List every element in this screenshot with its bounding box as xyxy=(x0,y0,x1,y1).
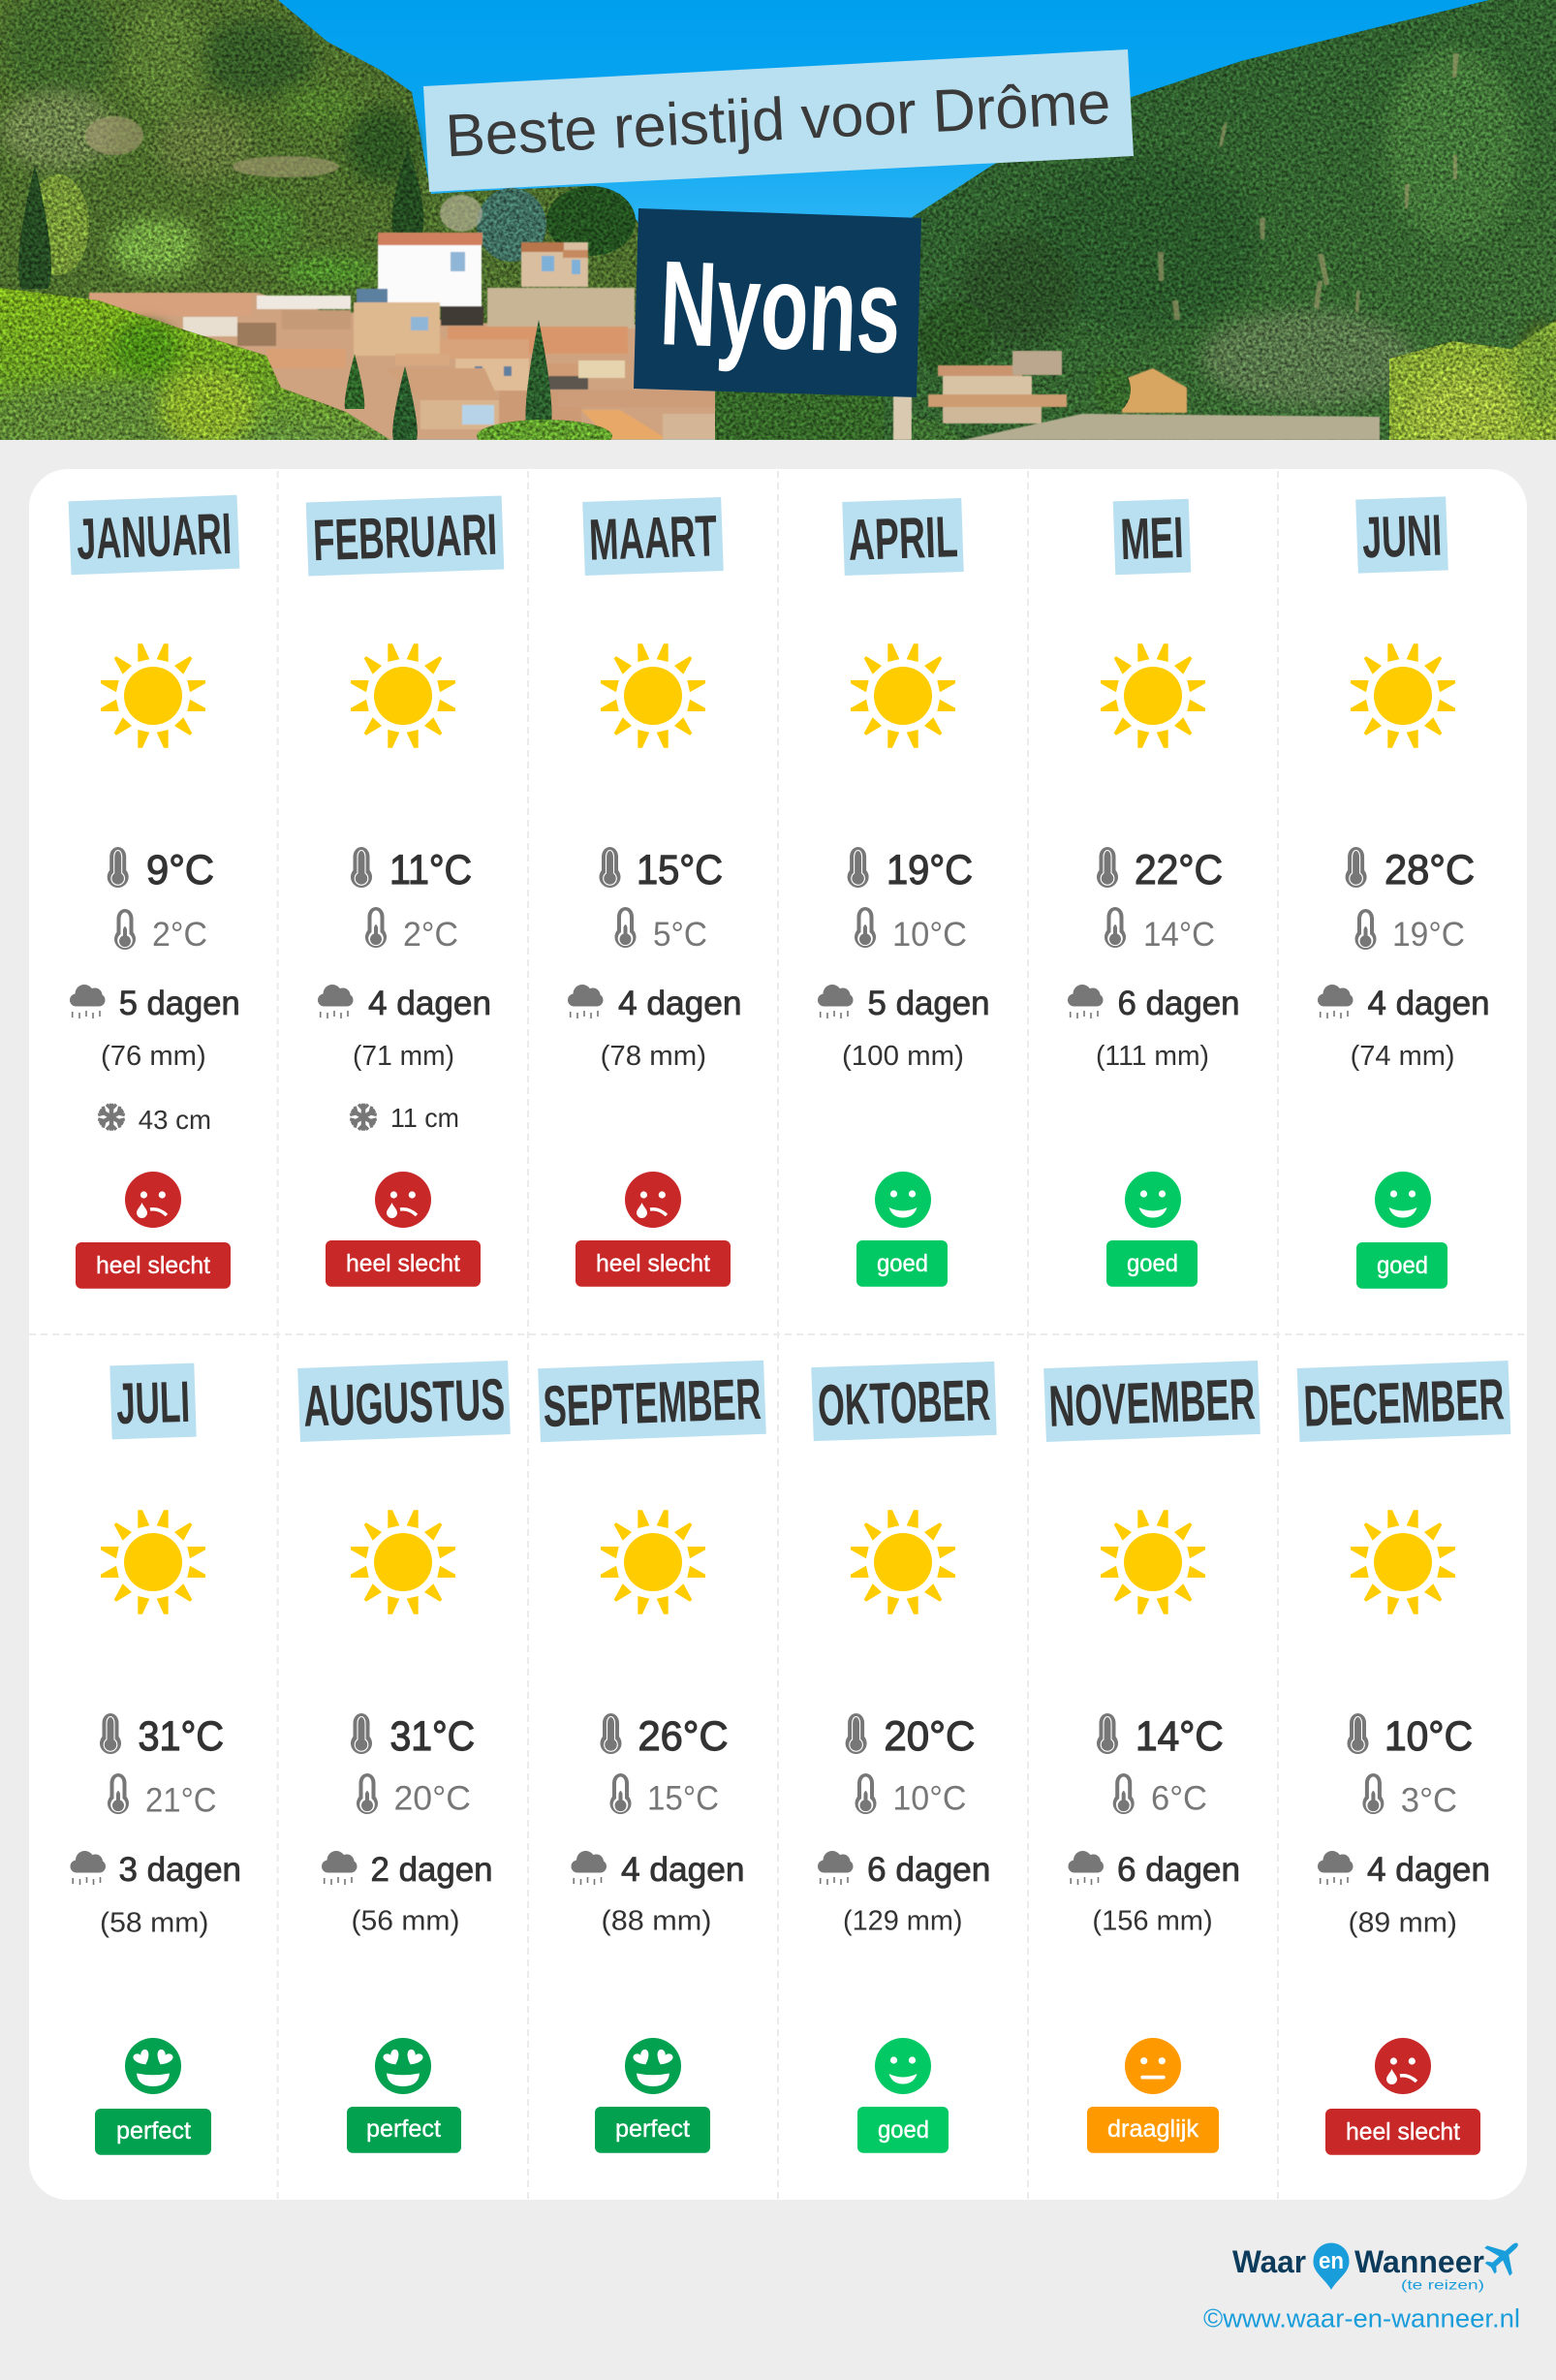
low temperature: 2°C xyxy=(403,916,458,954)
logo: Waar en Wanneer: Waar xyxy=(1232,2244,1306,2279)
rating badge: heel slecht xyxy=(1346,2118,1460,2145)
icon: sun xyxy=(351,643,455,748)
snowfall xyxy=(97,1104,211,1135)
logo: Waar en Wanneer: (te reizen) xyxy=(1401,2277,1484,2293)
rocks and mountain streaks xyxy=(85,53,1459,320)
heading: januari: JANUARI xyxy=(76,501,233,572)
rating badge xyxy=(95,2109,211,2155)
month: maart xyxy=(568,497,742,1287)
heading: maart xyxy=(582,497,724,576)
rainfall: (78 mm) xyxy=(601,1041,706,1072)
heading: november: NOVEMBER xyxy=(1047,1366,1257,1439)
icon: sun xyxy=(601,643,705,748)
place banner: Nyons xyxy=(634,208,921,397)
low temperature xyxy=(357,1773,471,1818)
heading: oktober xyxy=(811,1362,997,1441)
low temperature: 10°C xyxy=(892,1780,966,1818)
heading: februari: FEBRUARI xyxy=(312,502,498,573)
high temperature xyxy=(351,847,472,893)
high temperature: 22°C xyxy=(1135,847,1223,893)
rating badge: draaglijk xyxy=(1107,2115,1198,2143)
rain days: 6 dagen xyxy=(867,1851,990,1889)
low temperature: 14°C xyxy=(1143,916,1215,954)
icon: sun xyxy=(1351,1510,1455,1614)
rating badge xyxy=(347,2107,461,2153)
snowfall: 11 cm xyxy=(390,1103,459,1133)
place banner: Nyons: Nyons xyxy=(658,236,903,379)
logo: Waar en Wanneer xyxy=(1232,2230,1530,2293)
icon: rating face xyxy=(1375,2038,1431,2094)
low temperature: 6°C xyxy=(1151,1780,1207,1818)
rating badge: heel slecht xyxy=(596,1250,710,1277)
low temperature xyxy=(855,1773,966,1818)
rainfall: (156 mm) xyxy=(1092,1906,1213,1937)
heading: juli xyxy=(109,1363,197,1439)
heading: juli: JULI xyxy=(115,1369,191,1436)
rain days: 4 dagen xyxy=(1367,1851,1490,1889)
high temperature xyxy=(848,847,973,893)
snowfall: 43 cm xyxy=(139,1105,211,1135)
rain days: 4 dagen xyxy=(618,985,742,1022)
snowfall xyxy=(349,1103,459,1133)
high temperature xyxy=(1097,1713,1224,1760)
icon: rating face xyxy=(1375,1172,1431,1228)
icon: sun xyxy=(1101,1510,1205,1614)
logo: Waar en Wanneer: en xyxy=(1319,2248,1344,2274)
low temperature: 2°C xyxy=(152,916,207,954)
low temperature xyxy=(1105,907,1215,954)
high temperature: 11°C xyxy=(389,847,472,893)
rain days: 4 dagen xyxy=(621,1851,744,1889)
rating badge xyxy=(595,2107,710,2153)
high temperature xyxy=(599,847,723,893)
icon: sun xyxy=(351,1510,455,1614)
icon: rating face xyxy=(625,2038,681,2094)
high temperature xyxy=(100,1713,224,1760)
low temperature xyxy=(365,907,458,954)
rainfall: (88 mm) xyxy=(601,1906,711,1937)
icon: rating face xyxy=(875,2038,931,2094)
high temperature xyxy=(351,1713,475,1760)
heading: juni xyxy=(1355,496,1448,574)
rainfall: (74 mm) xyxy=(1351,1041,1455,1072)
title banner: Beste reistijd voor Drôme xyxy=(423,49,1134,192)
icon: sun xyxy=(851,1510,955,1614)
month: januari xyxy=(69,495,240,1289)
month: april xyxy=(818,498,990,1287)
rain days: 6 dagen xyxy=(1118,985,1240,1022)
rain days: 4 dagen xyxy=(368,985,491,1022)
icon: sun xyxy=(851,643,955,748)
header photo: Nyons village and mountains xyxy=(0,0,1556,453)
high temperature: 9°C xyxy=(146,847,214,893)
high temperature: 20°C xyxy=(884,1713,975,1760)
high temperature xyxy=(108,847,214,893)
rain days: 6 dagen xyxy=(1117,1851,1240,1889)
low temperature: 5°C xyxy=(653,916,707,954)
rainfall: (71 mm) xyxy=(353,1041,454,1072)
low temperature: 3°C xyxy=(1401,1782,1457,1820)
rainfall: (100 mm) xyxy=(842,1041,964,1072)
icon: rating face xyxy=(1125,2038,1181,2094)
icon: rating face xyxy=(1125,1172,1181,1228)
village buildings xyxy=(89,233,1380,440)
high temperature: 19°C xyxy=(887,847,973,893)
website credit: ©www.waar-en-wanneer.nl xyxy=(1203,2304,1520,2333)
heading: april xyxy=(842,498,964,576)
heading: oktober: OKTOBER xyxy=(817,1367,991,1438)
rainfall: (56 mm) xyxy=(351,1906,459,1937)
month: februari xyxy=(306,495,504,1287)
heading: juni: JUNI xyxy=(1361,503,1443,570)
rating badge: goed xyxy=(878,2116,929,2144)
rainfall: (58 mm) xyxy=(100,1908,209,1939)
panel: months card xyxy=(29,469,1527,2200)
month: mei xyxy=(1068,499,1240,1287)
month: november xyxy=(1043,1361,1260,2153)
rating badge xyxy=(576,1240,731,1287)
rating badge xyxy=(856,1240,948,1287)
icon: rating face xyxy=(625,1172,681,1228)
rating badge: perfect xyxy=(615,2115,690,2143)
rating badge xyxy=(1325,2109,1480,2155)
low temperature xyxy=(610,1773,719,1818)
rating badge: heel slecht xyxy=(346,1250,460,1277)
icon: rating face xyxy=(125,2038,181,2094)
month: juli xyxy=(70,1363,241,2155)
heading: augustus xyxy=(297,1361,511,1442)
title banner: Beste reistijd voor Drôme: Beste reistijd voor Drôme xyxy=(444,70,1112,170)
high temperature: 28°C xyxy=(1385,847,1475,893)
rating badge xyxy=(1106,1240,1198,1287)
icon: map pin xyxy=(1313,2242,1350,2290)
rating badge xyxy=(1087,2107,1219,2153)
rating badge: perfect xyxy=(116,2117,191,2145)
low temperature: 19°C xyxy=(1392,916,1465,954)
low temperature xyxy=(614,907,707,954)
icon: rating face xyxy=(875,1172,931,1228)
logo: Waar en Wanneer: Wanneer xyxy=(1354,2244,1484,2279)
low temperature xyxy=(1362,1773,1457,1820)
heading: september: SEPTEMBER xyxy=(542,1366,762,1439)
high temperature xyxy=(601,1713,729,1760)
icon: sun xyxy=(101,643,205,748)
rain days: 2 dagen xyxy=(370,1851,492,1889)
icon: rating face xyxy=(375,1172,431,1228)
rain days: 4 dagen xyxy=(1368,985,1490,1022)
low temperature: 21°C xyxy=(145,1782,217,1820)
low temperature: 20°C xyxy=(393,1780,471,1818)
low temperature xyxy=(114,909,207,954)
rainfall: (111 mm) xyxy=(1096,1041,1209,1072)
heading: augustus: AUGUSTUS xyxy=(302,1366,506,1439)
high temperature: 10°C xyxy=(1385,1713,1473,1760)
high temperature: 31°C xyxy=(389,1713,475,1760)
icon: airplane xyxy=(1478,2230,1530,2282)
high temperature xyxy=(1346,847,1475,893)
low temperature xyxy=(1113,1773,1207,1818)
rating badge: goed xyxy=(1377,1252,1428,1279)
icon: rating face xyxy=(125,1172,181,1228)
rain days: 5 dagen xyxy=(868,985,990,1022)
high temperature xyxy=(1097,847,1223,893)
heading: april: APRIL xyxy=(847,504,959,573)
rain days: 3 dagen xyxy=(118,1851,241,1889)
rating badge: goed xyxy=(1127,1250,1178,1277)
month: december xyxy=(1297,1361,1510,2155)
high temperature xyxy=(1347,1713,1473,1760)
rainfall: (129 mm) xyxy=(843,1906,963,1937)
rating badge xyxy=(326,1240,481,1287)
heading: februari xyxy=(306,495,504,577)
icon: sun xyxy=(1101,643,1205,748)
icon: rating face xyxy=(375,2038,431,2094)
rainfall: (76 mm) xyxy=(101,1041,206,1072)
heading: maart: MAART xyxy=(588,503,718,573)
low temperature xyxy=(855,907,967,954)
low temperature xyxy=(108,1773,217,1820)
month: augustus xyxy=(297,1361,511,2153)
rating badge: goed xyxy=(877,1250,928,1277)
rating badge: perfect xyxy=(366,2115,441,2143)
rating badge xyxy=(857,2107,949,2153)
low temperature: 15°C xyxy=(647,1780,719,1818)
heading: januari xyxy=(69,495,239,575)
high temperature: 15°C xyxy=(637,847,723,893)
heading: mei: MEI xyxy=(1119,505,1185,572)
icon: sun xyxy=(101,1510,205,1614)
low temperature: 10°C xyxy=(892,916,967,954)
heading: november xyxy=(1043,1361,1260,1442)
heading: mei xyxy=(1113,499,1191,575)
month: juni xyxy=(1318,496,1490,1289)
low temperature xyxy=(1354,909,1465,954)
high temperature xyxy=(846,1713,975,1760)
rating badge xyxy=(1356,1242,1447,1289)
high temperature: 14°C xyxy=(1136,1713,1224,1760)
rating badge xyxy=(76,1242,231,1289)
high temperature: 31°C xyxy=(138,1713,224,1760)
icon: sun xyxy=(601,1510,705,1614)
month: september xyxy=(538,1361,766,2153)
rainfall: (89 mm) xyxy=(1349,1908,1457,1939)
month: oktober xyxy=(811,1362,997,2153)
rating badge: heel slecht xyxy=(96,1252,210,1279)
icon: sun xyxy=(1351,643,1455,748)
rain days: 5 dagen xyxy=(119,985,240,1022)
heading: september xyxy=(538,1361,766,1442)
high temperature: 26°C xyxy=(638,1713,729,1760)
